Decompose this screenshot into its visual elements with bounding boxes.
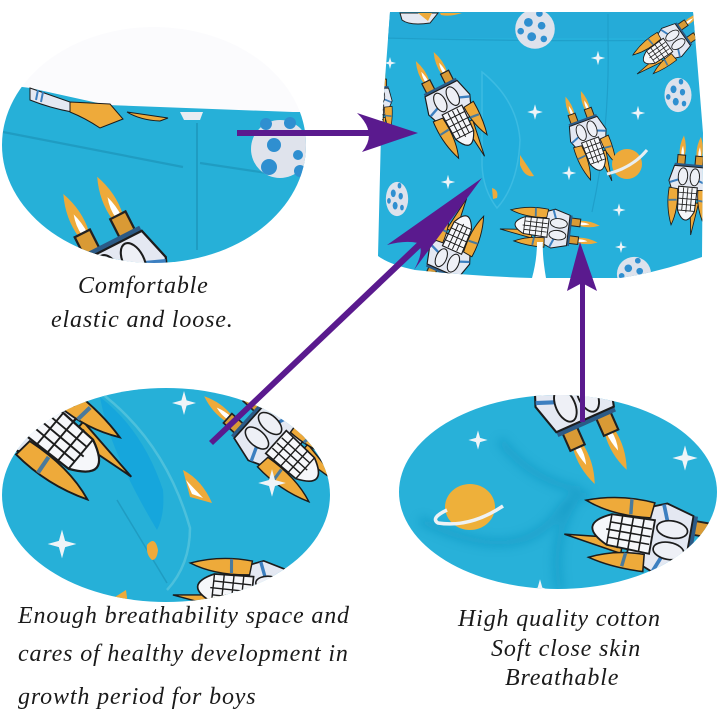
- arrow: front opening: [209, 178, 482, 445]
- product photo: boxer briefs: [378, 12, 703, 278]
- detail circle: front opening: [2, 388, 330, 602]
- print: rockets: [416, 52, 488, 160]
- print: stars: [527, 104, 543, 120]
- fly opening: [482, 72, 520, 208]
- caption: cotton: High quality cotton: [457, 606, 661, 632]
- caption: cotton: Breathable: [505, 665, 619, 691]
- caption: breathability: growth period for boys: [18, 684, 256, 710]
- caption: breathability: cares of healthy development in: [18, 641, 349, 667]
- arrow: fabric: [567, 242, 597, 422]
- waistband: [380, 12, 705, 38]
- caption: breathability: Enough breathability space and: [17, 603, 350, 629]
- fly opening: [100, 397, 163, 530]
- caption: comfortable: Comfortable: [78, 273, 209, 299]
- detail circle: fabric: [399, 395, 717, 589]
- detail circle: waistband: [2, 86, 306, 263]
- caption: cotton: Soft close skin: [491, 636, 641, 662]
- arrow: waistband: [237, 113, 418, 152]
- swirl folds: [420, 440, 590, 590]
- print: planets: [515, 9, 555, 49]
- caption: comfortable: elastic and loose.: [51, 307, 234, 333]
